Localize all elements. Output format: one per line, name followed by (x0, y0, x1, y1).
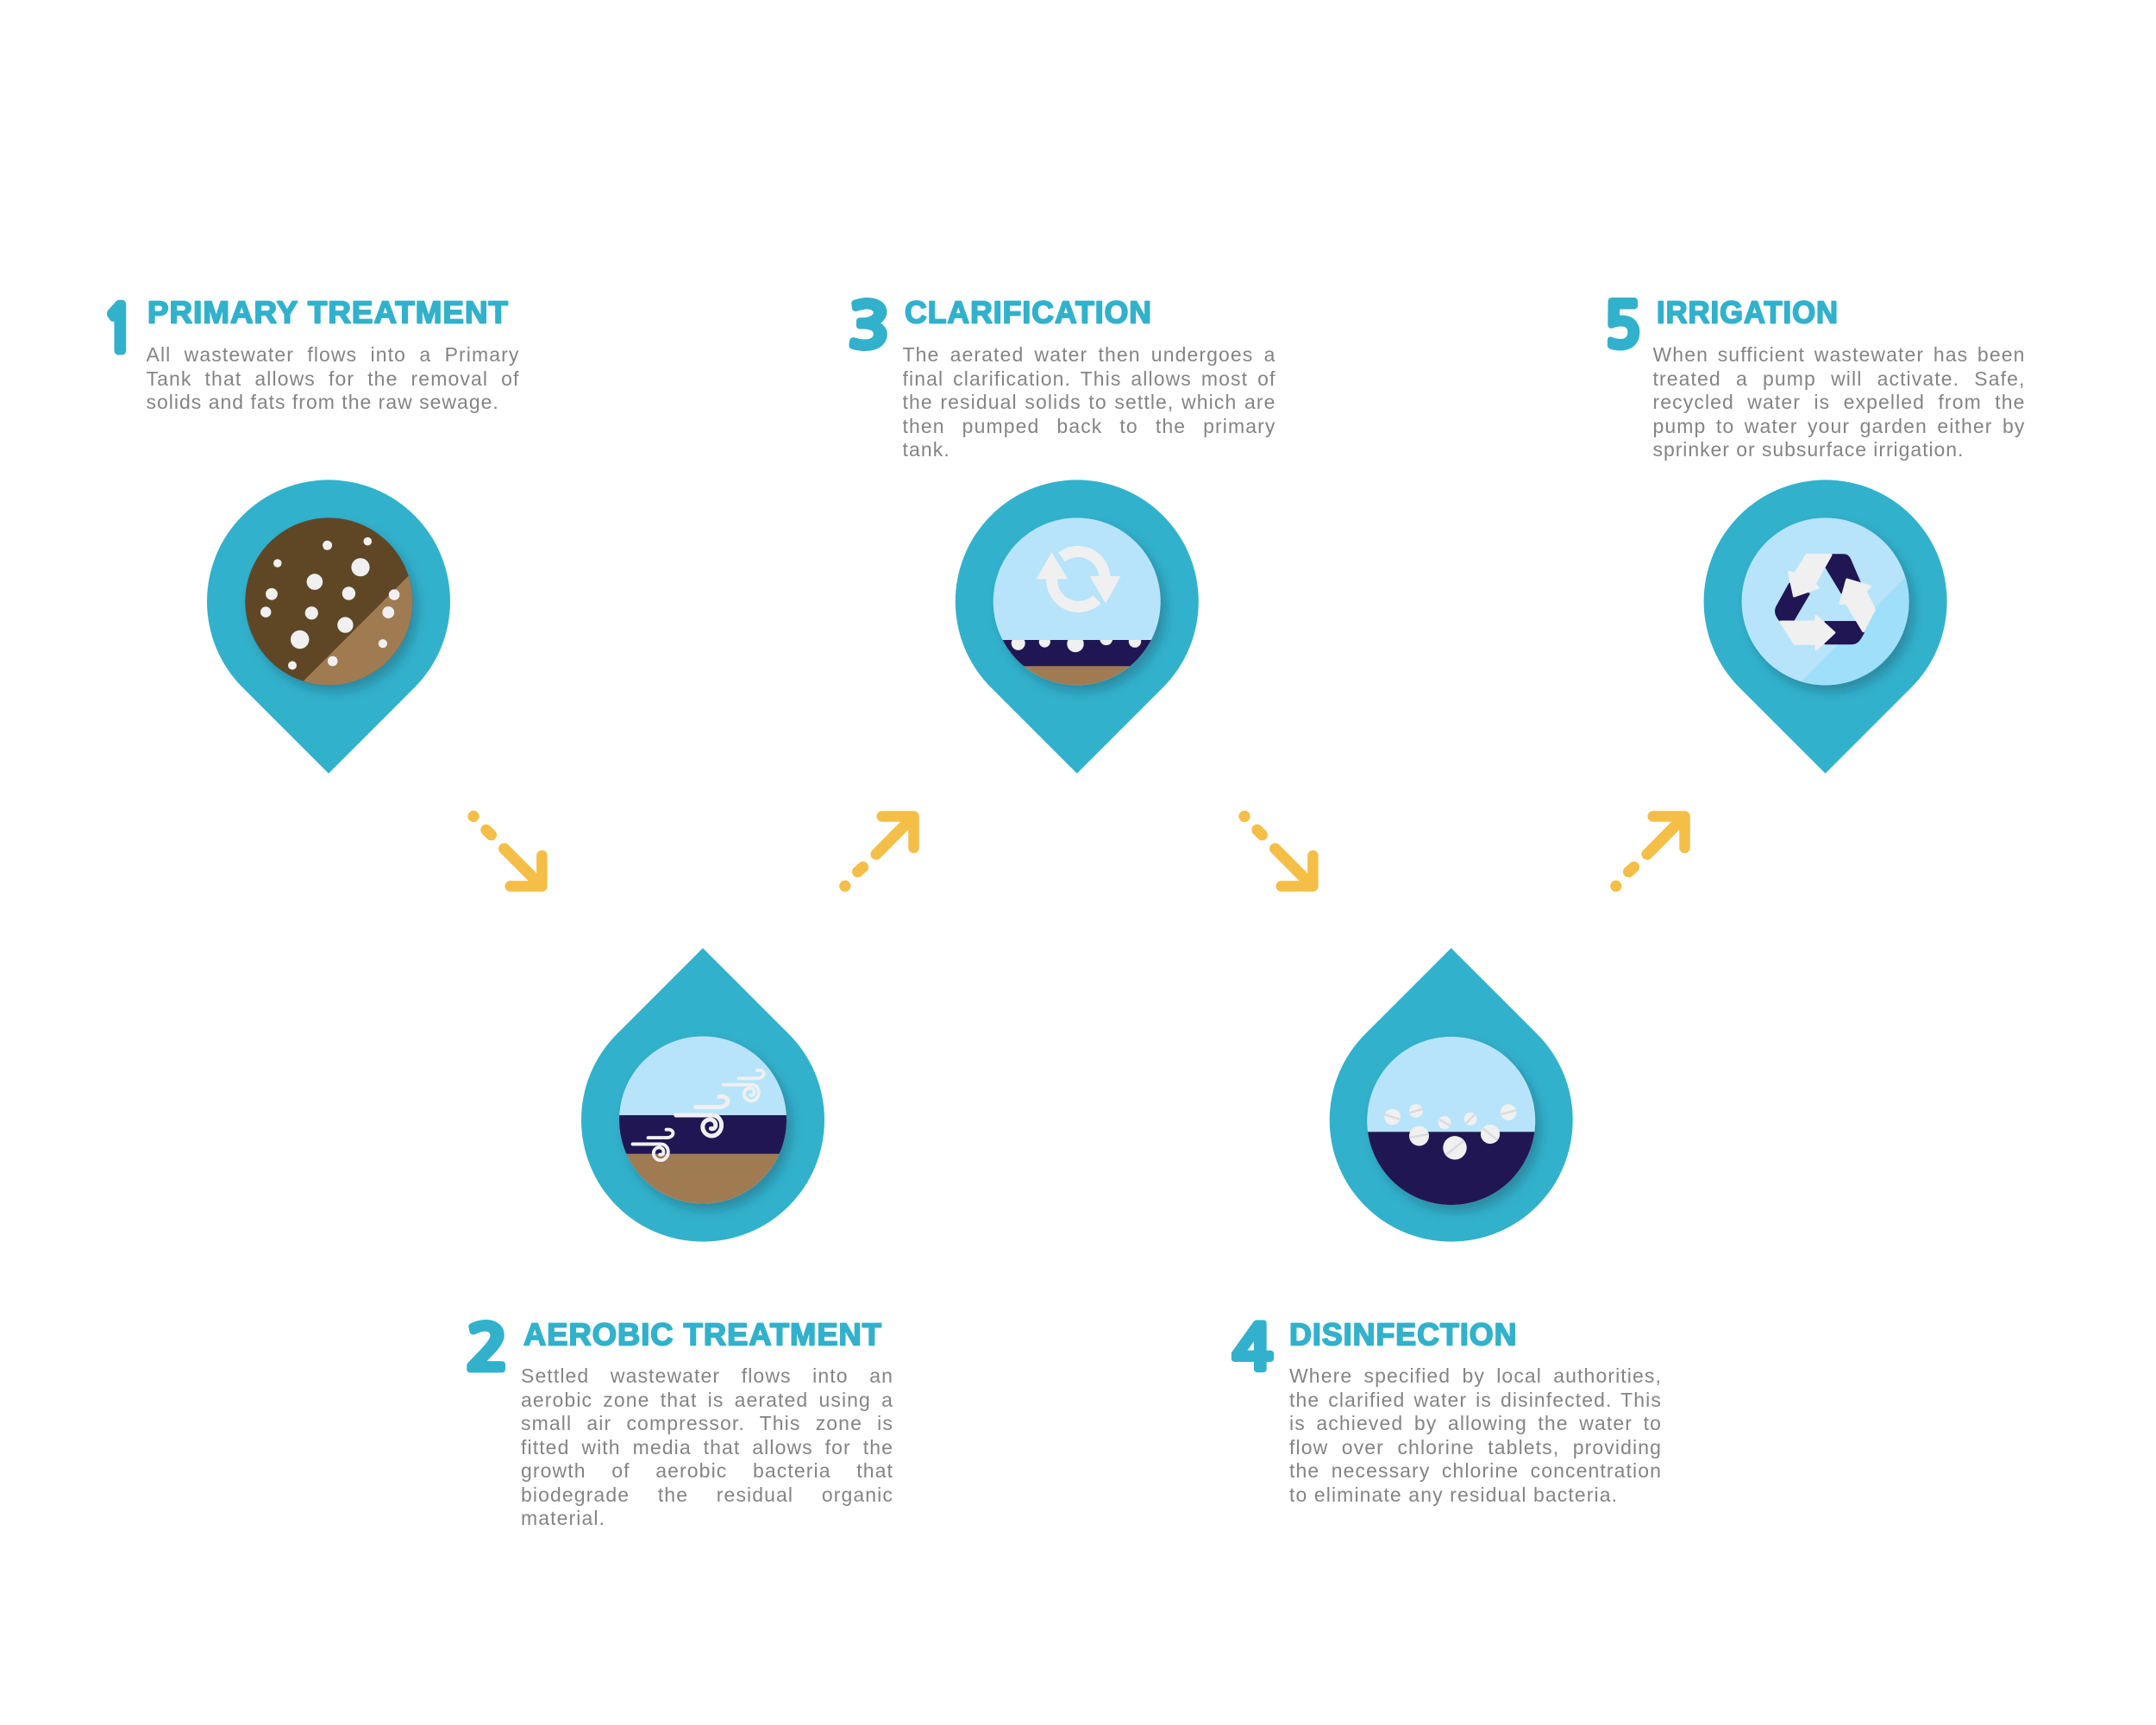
text block: step 3 description: The aerated water then undergoes a (902, 343, 1276, 366)
heading: aerobic treatment: AEROBIC TREATMENT (523, 1316, 882, 1352)
text block: step 5 description: pump to water your garden either by (1652, 415, 2025, 437)
icon: refresh arrows (1037, 551, 1121, 607)
text block: step 4 description: flow over chlorine tablets, providing (1289, 1436, 1662, 1458)
text block: step 3 description (902, 343, 1276, 464)
text block: step 4 description: the necessary chlorine concentration (1289, 1459, 1662, 1482)
text block: step 1 description: Tank that allows for the removal of (147, 367, 519, 390)
text block: step 2 description: growth of aerobic bacteria that (521, 1459, 893, 1482)
text block: step 4 description: to eliminate any residual bacteria. (1289, 1484, 1618, 1506)
number 1: 1 (103, 298, 135, 361)
number 5: 5 (1604, 295, 1641, 357)
text block: step 1 description (147, 343, 519, 416)
number 3: 3 (848, 295, 890, 357)
text block: step 3 description: final clarification. This allows most of (902, 367, 1276, 390)
pin: settling circle (956, 480, 1199, 774)
pin: solids circle (207, 480, 450, 774)
text block: step 1 description: All wastewater flows into a Primary (147, 343, 519, 366)
icon: chlorine tablets (1382, 1102, 1518, 1164)
panel: step 4 disinfection (1232, 948, 1662, 1511)
text block: step 2 description: Settled wastewater flows into an (521, 1364, 893, 1387)
text block: step 3 description: the residual solids to settle, which are (902, 391, 1276, 413)
text block: step 5 description (1652, 343, 2025, 464)
text block: step 5 description: When sufficient wastewater has been (1652, 343, 2025, 366)
text block: step 2 description: biodegrade the residual organic (521, 1484, 893, 1506)
pin: chlorine tablets circle (1330, 948, 1573, 1242)
text block: step 4 description: the clarified water is disinfected. This (1289, 1389, 1662, 1411)
arrow: step 2 to step 3 (839, 816, 914, 892)
text block: step 4 description: Where specified by local authorities, (1289, 1364, 1662, 1387)
icon: recycle symbol (1776, 555, 1875, 649)
panel: step 3 clarification (848, 294, 1276, 774)
heading: clarification: CLARIFICATION (905, 294, 1152, 329)
text block: step 2 description: aerobic zone that is aerated using a (521, 1389, 893, 1411)
text block: step 5 description: sprinker or subsurface irrigation. (1652, 438, 1964, 461)
arrow: step 4 to step 5 (1610, 816, 1685, 892)
pin: aeration circle (581, 948, 824, 1242)
infographic canvas (107, 298, 2025, 1525)
text block: step 2 description: material. (521, 1507, 605, 1529)
icon: wind swirls (633, 1070, 764, 1160)
panel: step 2 aerobic treatment (466, 948, 893, 1533)
heading: disinfection: DISINFECTION (1289, 1316, 1518, 1352)
text block: step 5 description: recycled water is expelled from the (1652, 391, 2025, 413)
heading: irrigation: IRRIGATION (1657, 294, 1839, 329)
panel: step 5 irrigation (1604, 294, 2025, 774)
number 2: 2 (466, 1317, 509, 1379)
text block: step 2 description: fitted with media that allows for the (521, 1436, 893, 1458)
arrow: step 3 to step 4 (1238, 811, 1313, 887)
pin: recycling circle (1704, 480, 1947, 774)
text block: step 4 description (1289, 1364, 1662, 1511)
text block: step 3 description: then pumped back to the primary (902, 415, 1276, 437)
text block: step 3 description: tank. (902, 438, 950, 461)
text block: step 1 description: solids and fats from the raw sewage. (147, 391, 499, 413)
text block: step 5 description: treated a pump will activate. Safe, (1652, 367, 2025, 390)
number 4: 4 (1232, 1317, 1273, 1379)
heading: primary treatment: PRIMARY TREATMENT (147, 294, 509, 329)
text block: step 2 description (521, 1364, 893, 1533)
arrow: step 1 to step 2 (467, 811, 542, 887)
panel: step 1 primary treatment (103, 294, 519, 774)
text block: step 2 description: small air compressor. This zone is (521, 1412, 893, 1434)
text block: step 4 description: is achieved by allowing the water to (1289, 1412, 1662, 1434)
